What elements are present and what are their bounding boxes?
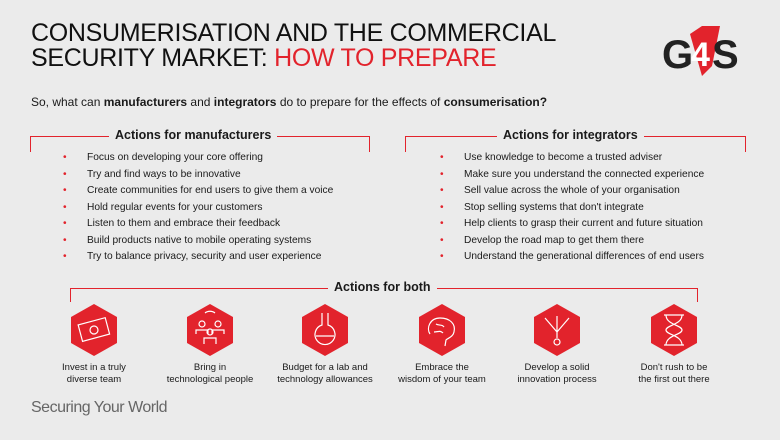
label: bring: technological people bbox=[167, 374, 253, 385]
label: rush: the first out there bbox=[638, 374, 710, 385]
list: integrators: Make sure you understand the connected experience bbox=[464, 168, 704, 180]
list: integrators: Sell value across the whole of your organisation bbox=[464, 185, 680, 196]
heading: integrators: Actions for integrators bbox=[503, 128, 638, 142]
label: budget: technology allowances bbox=[277, 374, 373, 385]
label: embrace: Embrace the bbox=[415, 362, 469, 373]
list: manufacturers: Focus on developing your core offering bbox=[87, 152, 263, 163]
icon: people bbox=[187, 304, 233, 356]
logo bbox=[662, 26, 739, 76]
label: embrace: wisdom of your team bbox=[398, 374, 486, 385]
subtitle: So, what can manufacturers and integrators do to prepare for the effects of consumerisation? bbox=[31, 95, 547, 109]
panel: both bbox=[70, 280, 698, 302]
icon: brain bbox=[419, 304, 465, 356]
list: manufacturers: Listen to them and embrace their feedback bbox=[87, 218, 280, 229]
icon: process bbox=[534, 304, 580, 356]
list: integrators: Stop selling systems that don't integrate bbox=[464, 202, 644, 212]
list: manufacturers: Build products native to mobile operating systems bbox=[87, 234, 311, 246]
logo: S bbox=[712, 33, 739, 76]
label: rush bbox=[638, 362, 710, 385]
list: integrators: Understand the generational differences of end users bbox=[464, 251, 704, 262]
heading: manufacturers: Actions for manufacturers bbox=[115, 128, 271, 142]
icon: money bbox=[71, 304, 117, 356]
footer: Securing Your World bbox=[31, 399, 167, 416]
list: manufacturers: Try to balance privacy, security and user experience bbox=[87, 251, 321, 262]
list: integrators: Develop the road map to get them there bbox=[464, 234, 644, 246]
label: invest: Invest in a truly bbox=[62, 362, 126, 373]
logo: G bbox=[662, 33, 691, 76]
list: manufacturers: Create communities for end users to give them a voice bbox=[87, 185, 333, 196]
list: integrators bbox=[440, 152, 704, 262]
label: develop: innovation process bbox=[517, 374, 597, 385]
label: bring bbox=[166, 362, 253, 385]
label: invest: diverse team bbox=[67, 374, 121, 385]
list: integrators: Use knowledge to become a trusted adviser bbox=[464, 152, 662, 163]
label: budget bbox=[277, 362, 373, 385]
list: manufacturers: Hold regular events for your customers bbox=[87, 202, 263, 212]
panel: manufacturers bbox=[30, 128, 370, 262]
label: budget: Budget for a lab and bbox=[282, 362, 368, 373]
label: develop: Develop a solid bbox=[525, 362, 589, 373]
label: embrace bbox=[398, 362, 486, 385]
title: SECURITY MARKET: HOW TO PREPARE bbox=[31, 44, 496, 72]
list: manufacturers bbox=[63, 152, 333, 262]
title: CONSUMERISATION AND THE COMMERCIAL bbox=[31, 19, 556, 47]
panel: integrators bbox=[405, 128, 746, 262]
list: manufacturers: Try and find ways to be innovative bbox=[87, 168, 241, 180]
heading: both: Actions for both bbox=[334, 280, 431, 294]
icon: flask bbox=[302, 304, 348, 356]
logo: 4 bbox=[691, 36, 710, 74]
label: bring: Bring in bbox=[194, 362, 226, 373]
label: develop bbox=[517, 362, 597, 385]
list: integrators: Help clients to grasp their current and future situation bbox=[464, 218, 703, 229]
icon: hourglass bbox=[651, 304, 697, 356]
label: rush: Don't rush to be bbox=[641, 362, 707, 373]
icons bbox=[71, 304, 697, 356]
title bbox=[31, 19, 556, 72]
label: invest bbox=[62, 362, 126, 385]
